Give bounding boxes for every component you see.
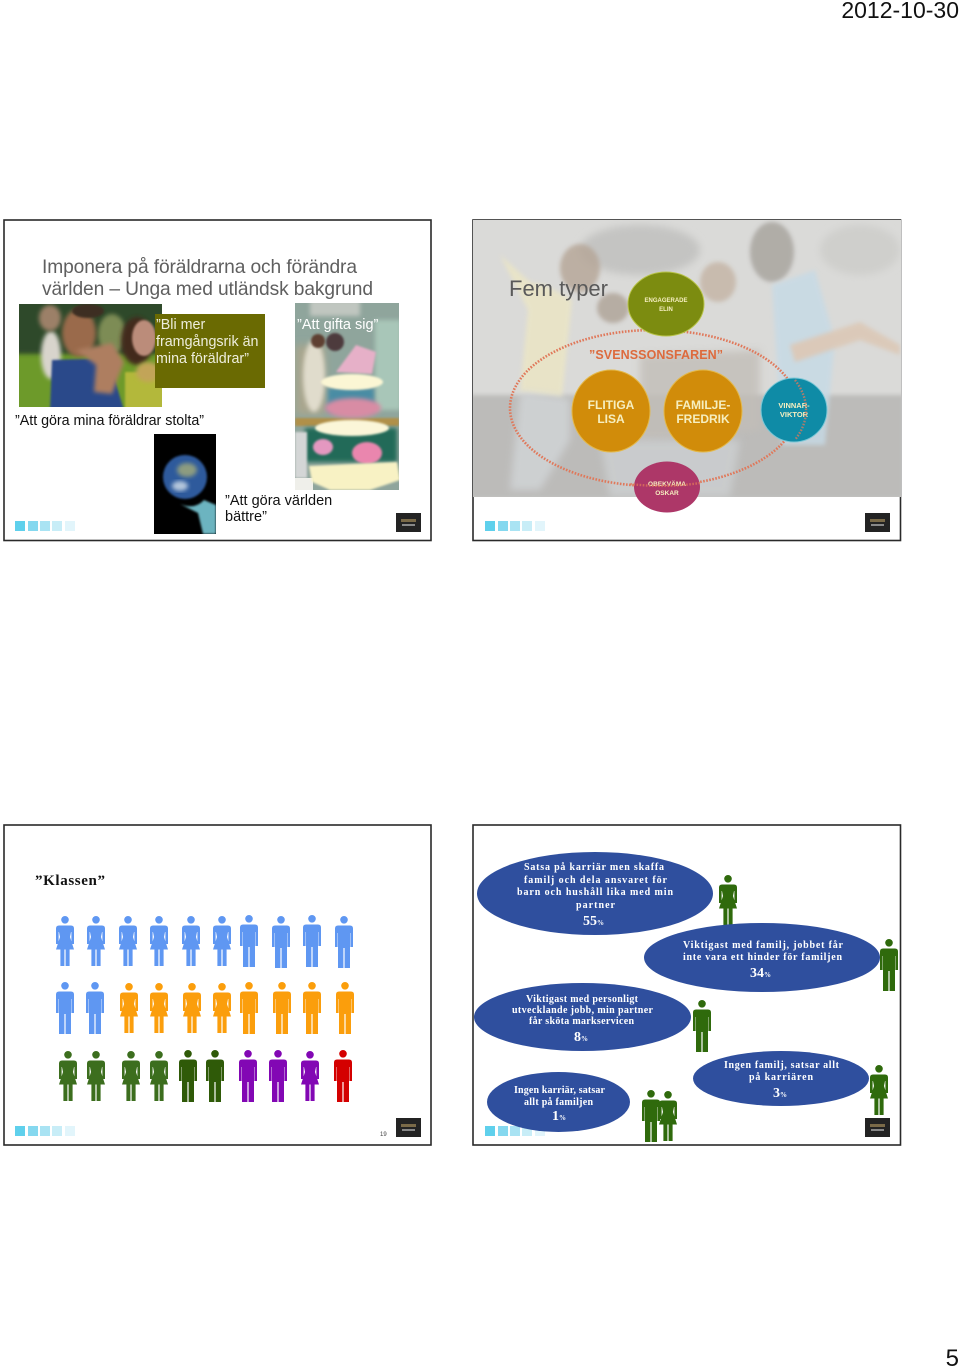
circle: vinnar: VIKTOR	[780, 410, 809, 419]
bubble: 55%: familj och dela ansvaret för	[524, 875, 668, 886]
bubble: 3%: på karriären	[749, 1072, 813, 1083]
circle: engagerade: ENGAGERADE	[644, 298, 688, 304]
callout: olive box: ”Bli mer	[156, 317, 205, 333]
logo	[865, 513, 890, 532]
panel: klassen slide	[4, 825, 431, 1145]
logo	[865, 1118, 890, 1137]
pictogram row 3	[59, 1050, 352, 1102]
slide title: Imponera på föräldrarna och förändra	[42, 257, 357, 278]
bubble: 8%: Viktigast med personligt	[526, 994, 639, 1005]
panel: survey slide	[473, 825, 900, 1145]
pictogram row 1	[56, 915, 353, 968]
caption: gifta sig: ”Att gifta sig”	[297, 317, 379, 333]
decorative blue squares	[485, 521, 545, 531]
dashed ellipse	[510, 330, 798, 486]
pictogram: man 8%	[693, 1000, 711, 1052]
circle: vinnar: VINNAR-	[778, 401, 810, 410]
circle: flitiga: FLITIGA	[588, 398, 635, 412]
photo: wedding cake	[295, 300, 401, 492]
logo	[396, 513, 421, 532]
dashed arc over circles	[630, 380, 806, 486]
slide title	[42, 257, 373, 300]
circle: obekväma: OSKAR	[655, 490, 679, 497]
bubble: 55%	[477, 852, 713, 935]
decorative blue squares	[15, 521, 75, 531]
caption: världen: ”Att göra världen	[225, 493, 332, 509]
bubble: 34%: Viktigast med familj, jobbet får	[683, 940, 844, 951]
page number: 19	[380, 1132, 387, 1138]
caption: världen	[225, 493, 332, 525]
photo: earth in hand	[154, 434, 216, 534]
heading: svenssonsfaren: ”SVENSSONSFAREN”	[589, 348, 723, 362]
logo	[396, 1118, 421, 1137]
pictogram: woman 3%	[870, 1065, 888, 1115]
pictogram row 2	[56, 982, 354, 1034]
bubble: 34%	[644, 923, 880, 992]
circle: flitiga: LISA	[597, 412, 625, 426]
bubble: 34%: 34%	[750, 966, 771, 981]
pictogram: man 34%	[880, 939, 898, 991]
bubble: 1%: 1%	[552, 1109, 566, 1124]
pictogram: couple 1%	[642, 1090, 677, 1142]
slide title: ”Klassen”	[35, 873, 105, 889]
circle: familje	[664, 370, 742, 452]
bubble: 55%: 55%	[583, 914, 604, 929]
callout: olive box: framgångsrik än	[156, 334, 259, 350]
bubble: 3%: 3%	[773, 1086, 787, 1101]
circle: obekväma	[634, 462, 700, 512]
pictogram: woman 55%	[719, 875, 737, 925]
bubble: 1%: allt på familjen	[524, 1097, 593, 1108]
callout: olive box	[155, 314, 265, 388]
circle: vinnar	[761, 378, 827, 442]
bubble: 55%: Satsa på karriär men skaffa	[524, 862, 664, 873]
bubble: 8%: utvecklande jobb, min partner	[512, 1005, 654, 1016]
callout: olive box: mina föräldrar”	[156, 351, 249, 367]
bubble: 8%	[474, 983, 691, 1051]
circle: flitiga	[572, 370, 650, 452]
bubble: 55%: barn och hushåll lika med min	[517, 887, 673, 898]
circle: familje: FAMILJE-	[676, 398, 730, 412]
photo: family	[19, 304, 162, 407]
panel: fem typer slide	[470, 220, 904, 540]
circle: obekväma: OBEKVÄMA	[648, 480, 686, 488]
circle: familje: FREDRIK	[676, 412, 730, 426]
decorative blue squares	[485, 1126, 545, 1136]
bubble: 3%	[693, 1051, 869, 1106]
bubble: 8%: får sköta markservicen	[529, 1016, 634, 1027]
circle: engagerade: ELIN	[659, 307, 673, 313]
slide title: världen – Unga med utländsk bakgrund	[42, 279, 373, 300]
background photo	[470, 220, 904, 499]
bubble: 3%: Ingen familj, satsar allt	[724, 1060, 840, 1071]
bubble: 55%: partner	[576, 900, 616, 911]
panel: imponera slide	[4, 220, 431, 540]
caption: världen: bättre”	[225, 509, 267, 525]
bubble: 8%: 8%	[574, 1030, 588, 1045]
slide title: Fem typer	[509, 276, 608, 301]
bubble: 34%: inte vara ett hinder för familjen	[683, 952, 842, 963]
caption: stolta: ”Att göra mina föräldrar stolta”	[15, 413, 204, 429]
bubble: 1%: Ingen karriär, satsar	[514, 1085, 606, 1096]
circle: engagerade	[628, 272, 704, 336]
decorative blue squares	[15, 1126, 75, 1136]
bubble: 1%	[487, 1072, 630, 1132]
